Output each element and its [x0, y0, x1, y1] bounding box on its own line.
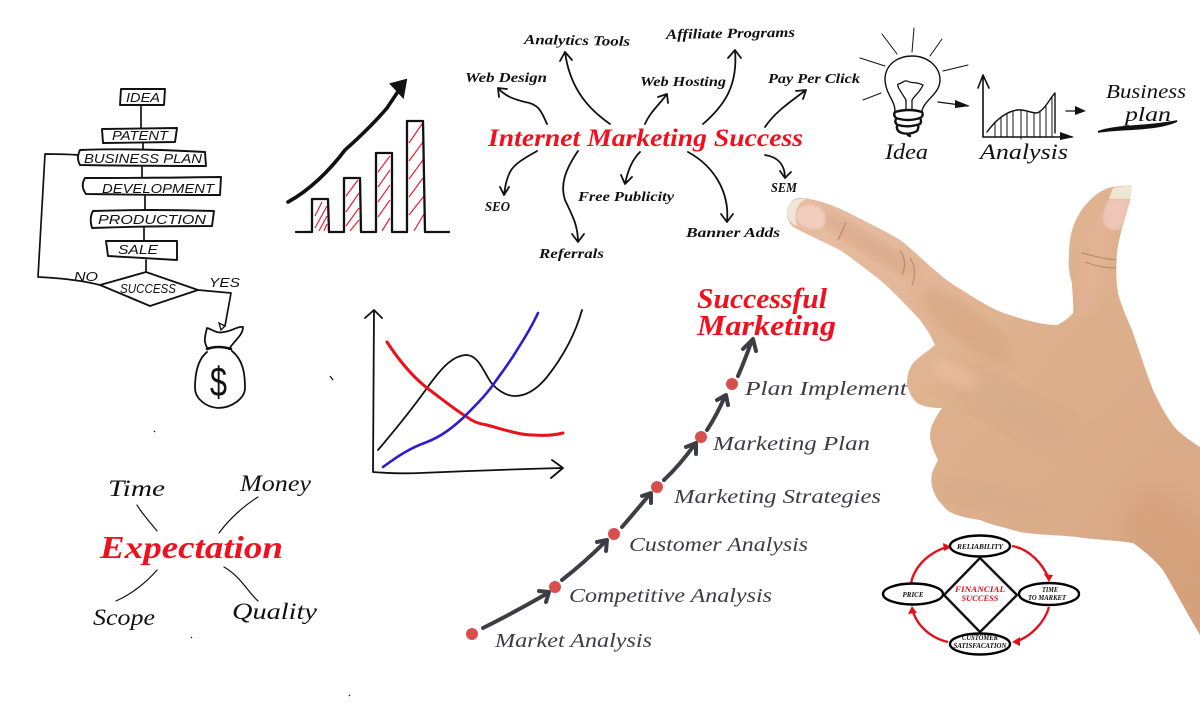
- black curve: [378, 310, 582, 450]
- step: competitive analysis: Competitive Analysis: [569, 585, 772, 607]
- flow box: patent: PATENT: [112, 128, 169, 143]
- hand shading: [825, 212, 1196, 628]
- map label: referrals: Referrals: [538, 247, 605, 262]
- map label: web hosting: Web Hosting: [640, 75, 726, 90]
- step: marketing strategies: Marketing Strategies: [673, 486, 881, 508]
- map arrows: [498, 50, 806, 242]
- flow box: idea: [120, 89, 165, 105]
- node: time to market: TO MARKET: [1028, 593, 1066, 602]
- heading: successful marketing: [696, 284, 836, 342]
- spokes: [116, 497, 258, 601]
- index finger nail: [787, 199, 825, 229]
- node: time to market: [1019, 583, 1079, 605]
- label: analysis: Analysis: [978, 139, 1068, 164]
- label: scope: Scope: [93, 605, 155, 630]
- thumb nail: [1103, 185, 1132, 230]
- connector lines: [38, 105, 231, 326]
- decision diamond: success: [100, 272, 198, 306]
- label: business plan: Business: [1106, 81, 1186, 103]
- flow box: idea: IDEA: [126, 90, 160, 105]
- icon: light bulb: [860, 28, 968, 136]
- flow box: sale: [106, 241, 177, 260]
- step: market analysis: Market Analysis: [494, 630, 652, 652]
- expectation diagram: [93, 471, 318, 630]
- stray specks: [154, 376, 350, 696]
- node: customer satisfaction: [950, 633, 1010, 654]
- icon: money bag: $: [210, 358, 227, 405]
- progress arrows: [483, 339, 756, 628]
- label: time: Time: [108, 476, 165, 501]
- node: reliability: [950, 536, 1010, 556]
- map label: analytics tools: Analytics Tools: [523, 33, 631, 50]
- label: business plan: [1098, 81, 1186, 132]
- idea to analysis to business plan sketch: [860, 28, 1186, 164]
- expectation title: Expectation: [99, 529, 283, 565]
- red cycle arrows: [908, 543, 1053, 646]
- flow box: production: PRODUCTION: [98, 212, 207, 227]
- map label: pay per click: Pay Per Click: [768, 72, 860, 87]
- blue curve: [383, 313, 538, 467]
- step: marketing plan: Marketing Plan: [712, 433, 870, 455]
- center label: financial success: [954, 584, 1005, 603]
- label: business plan: plan: [1122, 104, 1171, 126]
- bar chart with rising arrow: [288, 80, 449, 232]
- node: reliability: RELIABILITY: [956, 542, 1004, 551]
- map label: free publicity: Free Publicity: [577, 190, 675, 205]
- financial success cycle: [883, 536, 1079, 654]
- map label: affiliate programs: Affiliate Programs: [665, 26, 796, 43]
- map label: banner adds: Banner Adds: [685, 226, 781, 241]
- map label: sem: SEM: [771, 181, 797, 196]
- flow box: patent: [102, 128, 177, 143]
- icon: money bag: [195, 323, 245, 408]
- photo: pointing hand: [787, 185, 1200, 649]
- successful marketing staircase: [466, 284, 908, 652]
- flow box: development: DEVELOPMENT: [102, 181, 215, 196]
- step: plan implementation: Plan Implement: [744, 378, 908, 400]
- hatched bars: [296, 121, 449, 232]
- label: idea: Idea: [884, 139, 928, 164]
- chart: analysis: [978, 75, 1074, 140]
- diamond: [944, 558, 1017, 632]
- growth arrow: [288, 80, 406, 202]
- node: price: PRICE: [902, 590, 924, 599]
- flow box: business plan: BUSINESS PLAN: [84, 151, 203, 166]
- map label: web design: Web Design: [465, 71, 547, 86]
- label: yes: YES: [209, 275, 240, 290]
- center label: financial success: SUCCESS: [962, 593, 999, 603]
- red curve: [387, 342, 563, 435]
- step dots: [466, 378, 738, 640]
- map label: seo: SEO: [485, 200, 510, 215]
- heading: successful marketing: Successful: [697, 284, 827, 315]
- step: customer analysis: Customer Analysis: [629, 534, 808, 556]
- node: time to market: TIME: [1042, 585, 1058, 594]
- flow box: sale: SALE: [118, 242, 158, 257]
- label: quality: Quality: [232, 599, 318, 624]
- arrow: analysis to business plan: [1066, 106, 1086, 115]
- decision diamond: success: SUCCESS: [120, 281, 176, 296]
- map title: Internet Marketing Success: [487, 125, 803, 152]
- label: money: Money: [239, 471, 312, 496]
- arrow: idea to analysis: [938, 100, 970, 108]
- label: no: NO: [74, 269, 98, 284]
- node: customer satisfaction: SATISFACATION: [954, 641, 1007, 650]
- flowchart: [38, 89, 245, 408]
- node: price: [883, 584, 943, 604]
- heading: successful marketing: Marketing: [696, 311, 836, 342]
- flow box: production: [91, 210, 214, 228]
- node: customer satisfaction: CUSTOMER: [962, 633, 998, 642]
- line chart: [365, 310, 582, 478]
- flow box: development: [83, 177, 221, 196]
- internet marketing mind map: [465, 26, 860, 262]
- axes: [365, 310, 563, 478]
- center label: financial success: FINANCIAL: [954, 584, 1005, 594]
